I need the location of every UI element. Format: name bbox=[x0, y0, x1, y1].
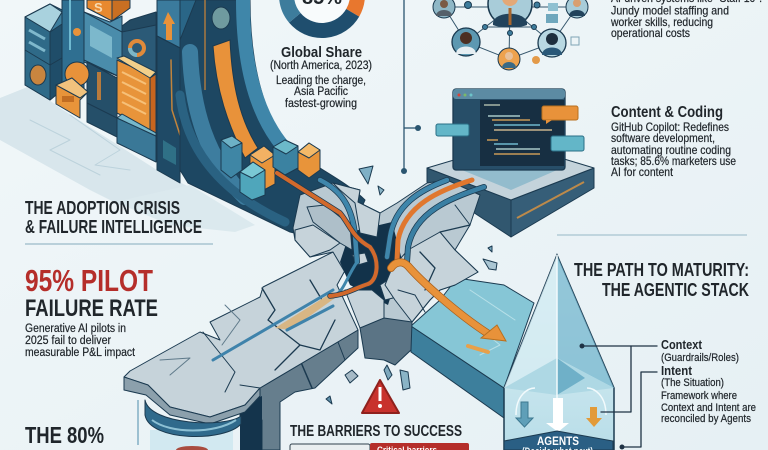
data city blocks bbox=[25, 0, 206, 183]
floating shards bbox=[359, 166, 373, 184]
agents label: AGENTS bbox=[537, 434, 579, 448]
stat: 95 percent pilot failure rate: Generative AI pilots in bbox=[25, 323, 126, 335]
chat bubble: right teal bbox=[551, 136, 584, 151]
heading: adoption crisis: THE ADOPTION CRISIS bbox=[25, 198, 180, 218]
text: top-right service block: Jundy model staffing and bbox=[611, 4, 729, 18]
text: context and intent legend: (The Situation) bbox=[661, 377, 724, 389]
vertical connector with nodes bbox=[401, 0, 421, 174]
block: blue panel tower bbox=[65, 12, 122, 137]
glass prism: agentic stack bbox=[504, 255, 614, 450]
text: context and intent legend: reconciled by Agents bbox=[661, 413, 751, 425]
curved falling data ribbon bbox=[180, 0, 365, 245]
block: left tower bbox=[25, 4, 62, 100]
text: content and coding: GitHub Copilot: Redefines bbox=[611, 120, 729, 134]
ground shadow under data city bbox=[0, 86, 255, 232]
block: orange S box bbox=[87, 0, 130, 21]
platform bbox=[427, 143, 594, 237]
ribbon: outer blue band bbox=[243, 0, 288, 152]
person: lower right bbox=[538, 29, 566, 57]
divider above path to maturity bbox=[557, 234, 747, 236]
agents label bbox=[522, 434, 593, 450]
data cables through the crack bbox=[277, 173, 484, 297]
stat: 95 percent pilot failure rate: 95% PILOT bbox=[25, 263, 153, 298]
network nodes bbox=[464, 2, 540, 36]
text: top-right service block bbox=[610, 0, 762, 40]
stat: 95 percent pilot failure rate: 2025 fail to deliver bbox=[25, 335, 111, 347]
text: context and intent legend: Context bbox=[661, 338, 703, 352]
heading: path to maturity bbox=[574, 260, 749, 300]
heading: adoption crisis bbox=[25, 198, 202, 237]
block: orange table panel bbox=[117, 56, 156, 133]
text: global share bbox=[270, 44, 372, 110]
down arrow: white bbox=[546, 398, 569, 432]
person: top left bbox=[433, 0, 455, 18]
orange arrow across slab bbox=[391, 262, 506, 341]
isometric cubes bbox=[221, 136, 320, 200]
text: global share: fastest-growing bbox=[285, 98, 357, 110]
person: bottom centre bbox=[498, 48, 520, 70]
gear and small icons bbox=[532, 3, 579, 64]
text: global share: (North America, 2023) bbox=[270, 60, 372, 72]
text: global share: Global Share bbox=[281, 44, 362, 61]
text: top-right service block: operational costs bbox=[611, 26, 690, 40]
glass jar with blue lid bbox=[138, 400, 241, 450]
dark void bbox=[340, 222, 402, 305]
warning triangle icon bbox=[362, 380, 399, 413]
text: top-right service block: worker skills, reducing bbox=[610, 15, 713, 29]
text: global share: Asia Pacific bbox=[294, 86, 348, 98]
text: content and coding bbox=[611, 104, 736, 179]
central crack rubble bbox=[293, 166, 497, 404]
text: context and intent legend bbox=[661, 338, 756, 425]
agents roof panel bbox=[504, 431, 613, 450]
block: orange small box bbox=[56, 78, 88, 118]
text: content and coding: software development, bbox=[611, 131, 715, 145]
ribbon: orange band bbox=[213, 40, 258, 158]
barrier table top row bbox=[290, 443, 469, 450]
slab top surface bbox=[124, 252, 358, 417]
text: context and intent legend: Framework where bbox=[661, 390, 737, 402]
rubble base bbox=[293, 180, 480, 340]
chat bubble: orange bbox=[542, 106, 578, 124]
text: content and coding: Content & Coding bbox=[611, 104, 723, 121]
chat bubble: left teal bbox=[436, 124, 469, 136]
person: lower left bbox=[452, 28, 480, 56]
void under slab bbox=[240, 396, 262, 450]
text: global share: Leading the charge, bbox=[276, 75, 366, 87]
blue and tan spike in slab bbox=[275, 292, 335, 330]
ribbon: lower blue band bbox=[180, 95, 285, 222]
slab side face bbox=[240, 330, 358, 450]
down arrow: blue bbox=[516, 402, 533, 427]
laptop on platform bbox=[427, 89, 594, 237]
block: narrow pillar bbox=[62, 0, 84, 90]
coin bbox=[212, 7, 230, 29]
block: lower teal box bbox=[117, 114, 156, 162]
teal slab, right arm bbox=[411, 278, 534, 418]
donut chart: global share bbox=[286, 0, 358, 30]
stat: 95 percent pilot failure rate: measurable P&L impact bbox=[25, 347, 136, 359]
people network diagram bbox=[433, 0, 588, 70]
stat: 95 percent pilot failure rate: FAILURE RATE bbox=[25, 295, 158, 322]
leader lines bbox=[580, 344, 657, 450]
block: dark donut tower bbox=[122, 12, 157, 80]
person: manager bbox=[488, 0, 532, 27]
heading: barriers to success: THE BARRIERS TO SUCCESS bbox=[290, 423, 462, 440]
text: context and intent legend: Intent bbox=[661, 364, 693, 378]
text: context and intent legend: Context and Intent are bbox=[661, 402, 756, 414]
cracked stone slab, left arm bbox=[124, 252, 358, 450]
person: top right bbox=[566, 0, 588, 18]
block: central tall tower bbox=[157, 0, 206, 183]
screen bbox=[453, 89, 565, 170]
text: content and coding: AI for content bbox=[611, 165, 674, 179]
text: content and coding: automating routine coding bbox=[611, 143, 731, 157]
text: content and coding: tasks; 85.6% marketers use bbox=[611, 154, 736, 168]
down arrow: orange bbox=[586, 407, 602, 427]
heading: adoption crisis: & FAILURE INTELLIGENCE bbox=[25, 217, 202, 237]
heading: the 80 percent: THE 80% bbox=[25, 422, 104, 448]
block: orange S box: S bbox=[94, 0, 103, 15]
stat: 95 percent pilot failure rate bbox=[25, 263, 158, 359]
text: context and intent legend: (Guardrails/Roles) bbox=[661, 352, 739, 364]
ribbon: mid blue band bbox=[190, 52, 245, 197]
